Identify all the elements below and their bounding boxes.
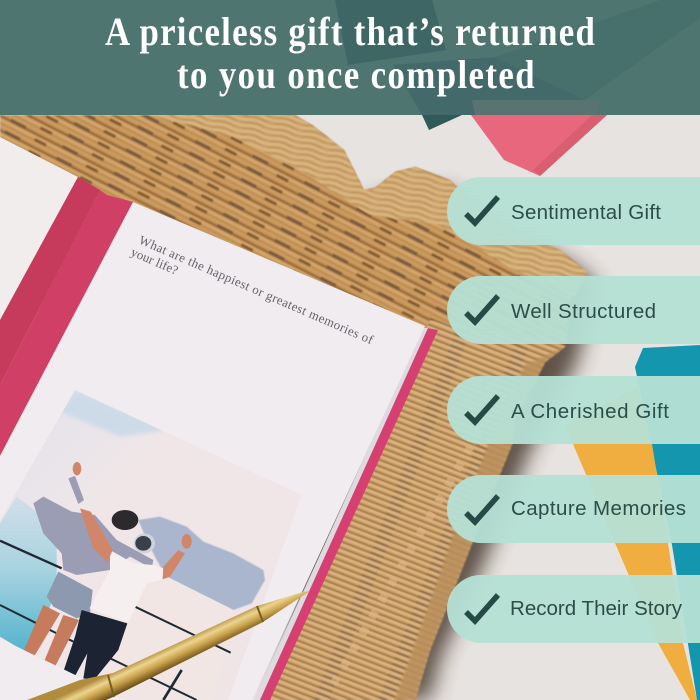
photo sky	[24, 414, 294, 700]
wicker tray	[0, 115, 587, 700]
label: Sentimental Gift	[511, 201, 661, 224]
check icon	[466, 496, 498, 522]
label: Capture Memories	[511, 497, 686, 520]
lower fine weave	[260, 320, 566, 700]
upper coarse weave	[0, 115, 587, 346]
wicker tray shadow	[275, 190, 596, 700]
check icon	[466, 595, 498, 621]
book: dark teal corner top right	[422, 115, 462, 130]
man trousers	[63, 610, 127, 680]
wicker knot band	[330, 430, 480, 690]
upper blue sky	[60, 390, 167, 437]
woman legs	[23, 605, 79, 667]
man raised arm	[163, 550, 185, 579]
pale water right	[168, 578, 234, 610]
benefit pill: A Cherished Gift	[447, 376, 700, 444]
check icon	[466, 197, 498, 223]
header see-through books	[335, 0, 446, 65]
pink spine right side	[0, 190, 133, 456]
man head	[134, 533, 155, 553]
wicker scalloped rim	[150, 115, 587, 296]
check icon	[466, 296, 498, 322]
right page	[0, 202, 425, 700]
title	[105, 11, 595, 98]
railings	[0, 541, 231, 700]
photo	[0, 390, 302, 700]
gold pen	[27, 591, 310, 700]
label: Well Structured	[511, 300, 656, 323]
man arm around woman	[80, 508, 113, 563]
pen bands	[108, 606, 263, 697]
page edge	[254, 328, 428, 700]
book: pink cover top right	[471, 115, 607, 176]
man hand	[182, 534, 192, 549]
sea left	[0, 497, 57, 657]
label: A Cherished Gift	[511, 400, 669, 423]
woman shorts	[47, 572, 93, 618]
woman raised arm	[68, 476, 84, 504]
woman hand	[73, 462, 81, 475]
header banner	[0, 0, 700, 115]
pink cover strip	[258, 328, 438, 700]
title: A priceless gift that’s returned	[105, 11, 595, 55]
man shirt	[89, 550, 163, 623]
wicker outer blurred edge	[395, 346, 566, 700]
benefit pill: Well Structured	[447, 276, 700, 344]
woman scarf	[33, 497, 153, 575]
question text: What are the happiest or greatest memories of	[137, 233, 376, 347]
woman hair	[112, 510, 138, 530]
label: Record Their Story	[510, 597, 683, 620]
question text: your life?	[129, 245, 181, 278]
benefit pill: Sentimental Gift	[447, 177, 700, 245]
pink spine left side	[0, 177, 100, 385]
open book	[0, 137, 438, 700]
books: teal and yellow stack on right	[565, 345, 700, 700]
distant mountain	[138, 517, 265, 610]
benefit pill: Capture Memories	[447, 475, 700, 543]
check icon	[466, 396, 498, 422]
benefit pill: Record Their Story	[447, 575, 700, 643]
left page	[0, 137, 78, 320]
title: to you once completed	[177, 54, 535, 98]
